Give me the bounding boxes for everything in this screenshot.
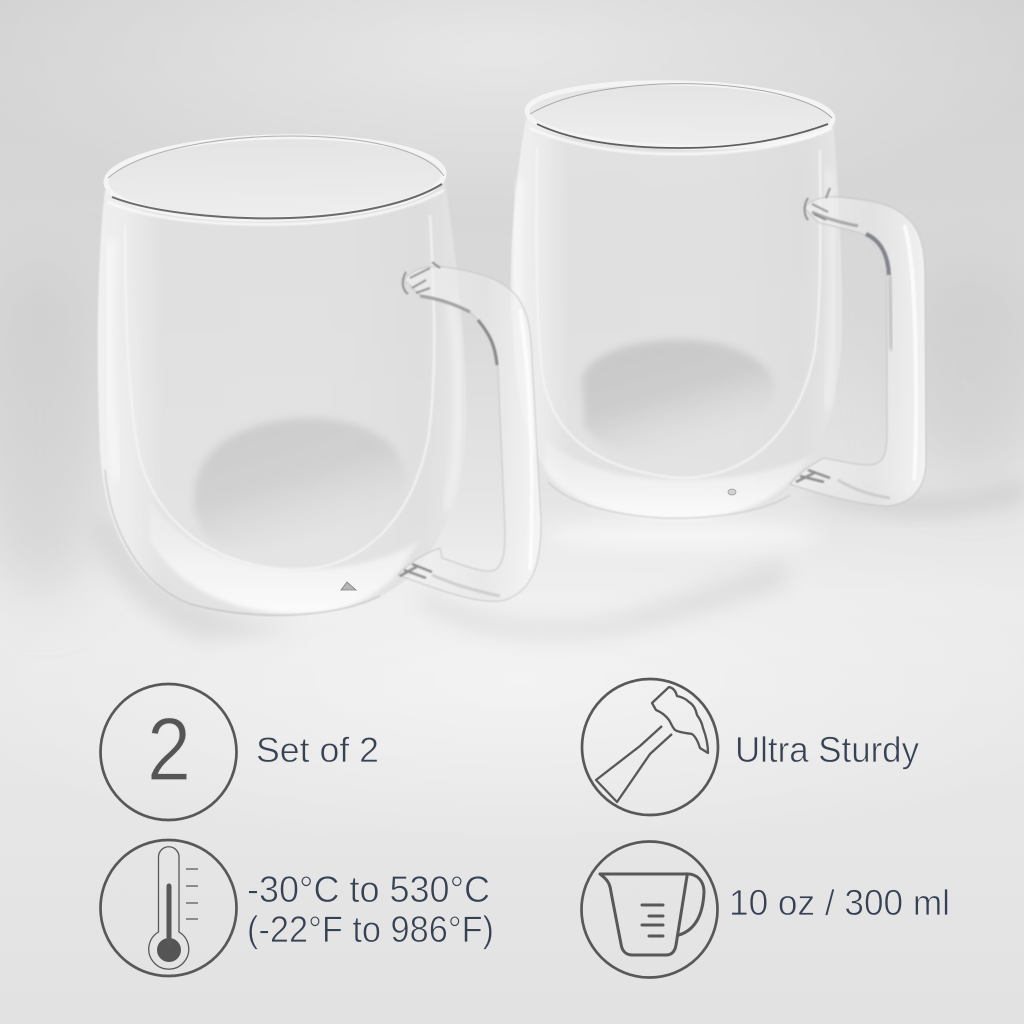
feature: set of 2: [100, 684, 379, 820]
back mug base highlight: [545, 440, 812, 520]
front mug base highlight: [150, 500, 420, 614]
label: capacity: 10 oz / 300 ml: [729, 882, 950, 923]
label: ultra sturdy: Ultra Sturdy: [735, 729, 919, 770]
label: set of 2: Set of 2: [256, 731, 379, 770]
icon: hammer: [582, 679, 718, 815]
front mug body: [98, 180, 466, 617]
front mug (left): [98, 133, 541, 617]
front mug inner wall: [125, 215, 434, 570]
label: temperature range: [247, 869, 494, 950]
back mug body: [511, 118, 842, 520]
icon: thermometer: [100, 840, 236, 976]
feature: temperature range: [100, 840, 494, 976]
label: temperature range: (-22°F to 986°F): [247, 909, 494, 950]
back mug (right): [511, 79, 926, 520]
front mug floor reflection: [194, 418, 405, 548]
back mug inner wall: [537, 148, 820, 478]
icon: number 2: 2: [147, 699, 191, 799]
icon: measuring cup: [582, 842, 718, 978]
back mug floor reflection: [582, 340, 776, 455]
label: temperature range: -30°C to 530°C: [247, 869, 490, 910]
back mug handle: [790, 197, 926, 506]
icon: number 2: [100, 684, 236, 820]
front mug rim: [105, 133, 445, 223]
feature: ultra sturdy: [582, 679, 919, 815]
back mug rim: [526, 79, 834, 151]
feature: capacity: [582, 842, 950, 978]
front mug handle: [398, 266, 541, 601]
